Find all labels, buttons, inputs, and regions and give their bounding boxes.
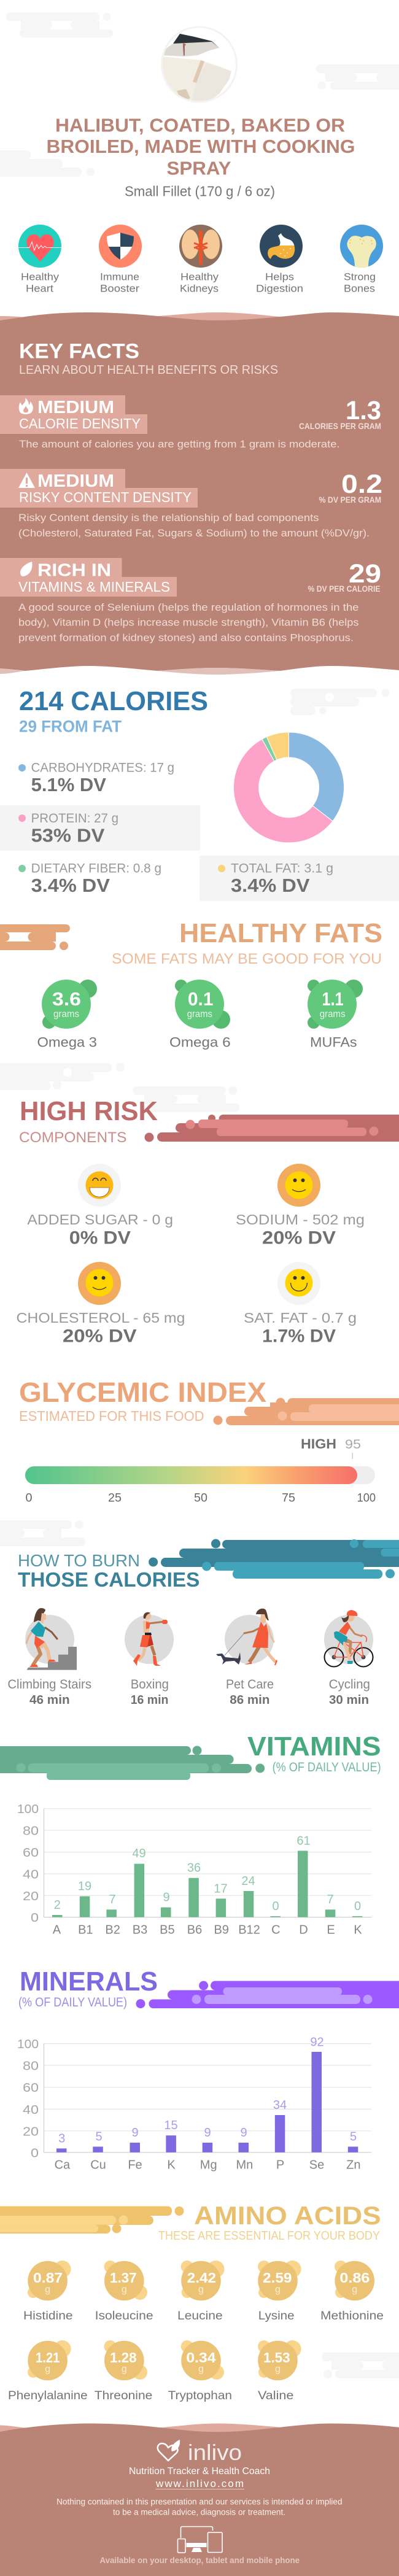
key facts heading: LEARN ABOUT HEALTH BENEFITS OR RISKS [19, 363, 278, 377]
bar chart: vitamins: 19 [78, 1879, 91, 1893]
disclaimer: Nothing contained in this presentation and our services is intended or implied [56, 2497, 343, 2507]
amino: phenylalanine [8, 2340, 88, 2402]
background pattern: amino acids [322, 2353, 399, 2378]
fat: mufas: MUFAs [310, 1035, 357, 1050]
bar chart: minerals: Mg [200, 2159, 217, 2172]
bar chart: vitamins: B9 [214, 1924, 229, 1937]
panel: footer [0, 2423, 399, 2576]
exercise: climbing stairs: 46 min [29, 1693, 70, 1707]
bar chart: vitamins: B3 [133, 1924, 147, 1937]
calorie density: 1.3 [346, 396, 381, 425]
exercise: climbing stairs: Climbing Stairs [7, 1677, 91, 1692]
calories heading: 214 CALORIES [19, 686, 208, 716]
benefit: healthy kidneys: Kidneys [180, 282, 219, 295]
amino: leucine: g [198, 2284, 204, 2295]
exercise: pet care: Pet Care [226, 1677, 274, 1692]
healthy fats heading [112, 918, 382, 967]
calorie density [0, 395, 381, 450]
bar chart: vitamins: B5 [160, 1924, 175, 1937]
benefit: helps digestion: Digestion [256, 282, 303, 295]
fat: mufas [308, 980, 363, 1050]
legend: total fat [200, 856, 399, 901]
bar chart: vitamins: 0 [354, 1900, 361, 1913]
amino: valine: Valine [258, 2389, 293, 2402]
glycemic index gauge: 50 [194, 1492, 207, 1505]
vitamins heading: VITAMINS [247, 1731, 381, 1762]
amino: lysine: 2.59 [263, 2270, 292, 2286]
disclaimer [56, 2497, 343, 2516]
bar chart: vitamins: 40 [23, 1868, 39, 1882]
bar chart: minerals: 9 [240, 2126, 247, 2140]
title: HALIBUT, COATED, BAKED OR [55, 114, 345, 136]
amino: tryptophan: g [198, 2364, 204, 2375]
icon: leaf [20, 562, 32, 576]
decoration: glycemic bars [214, 1398, 399, 1425]
key facts heading [19, 340, 278, 377]
amino acids heading: AMINO ACIDS [194, 2201, 381, 2230]
bar chart: vitamins: E [327, 1924, 335, 1937]
risk: sodium: SODIUM - 502 mg [236, 1212, 365, 1228]
amino: tryptophan: 0.34 [186, 2350, 216, 2365]
bar chart: vitamins: 36 [187, 1862, 201, 1875]
exercise: boxing: 16 min [131, 1693, 168, 1707]
benefit: healthy kidneys: Healthy [180, 271, 219, 282]
bar chart: vitamins [17, 1803, 371, 1937]
glycemic index heading [19, 1377, 266, 1424]
bar chart: minerals: 40 [23, 2103, 39, 2117]
bar chart: minerals: Zn [346, 2159, 360, 2172]
vitamins heading: (% OF DAILY VALUE) [273, 1760, 381, 1774]
rich in vitamins and minerals: RICH IN [37, 561, 111, 581]
exercise: climbing stairs [7, 1608, 91, 1707]
amino: methionine [320, 2261, 384, 2323]
bar chart: minerals: P [276, 2159, 284, 2172]
exercise: cycling: 30 min [329, 1693, 369, 1707]
bar chart: vitamins: 49 [132, 1847, 146, 1860]
bar chart: minerals: 5 [350, 2130, 357, 2143]
fat: omega 6: grams [187, 1009, 212, 1019]
amino: leucine [177, 2261, 225, 2323]
bar chart: minerals: 34 [273, 2098, 287, 2112]
risk: saturated fat [244, 1262, 357, 1347]
key facts heading: KEY FACTS [19, 340, 139, 363]
risky content density: MEDIUM [37, 471, 114, 491]
inlivo logo: inlivo [188, 2440, 242, 2465]
benefit: immune booster: Booster [100, 282, 139, 295]
amino: isoleucine [95, 2261, 153, 2323]
website link: www.inlivo.com [155, 2478, 244, 2489]
glycemic index gauge: 95 [345, 1437, 361, 1452]
legend: carbohydrates [18, 761, 174, 795]
vitamins heading [247, 1731, 381, 1774]
benefit: strong bones: Strong [344, 271, 376, 282]
amino: leucine: Leucine [177, 2310, 223, 2323]
legend: total fat: TOTAL FAT: 3.1 g [231, 862, 333, 876]
legend: dietary fiber: DIETARY FIBER: 0.8 g [31, 862, 161, 876]
bar chart: vitamins: B2 [105, 1924, 120, 1937]
rich in vitamins and minerals: 29 [349, 559, 381, 589]
legend: protein [0, 805, 200, 851]
bar chart: vitamins: 20 [23, 1890, 39, 1903]
amino: threonine [95, 2340, 152, 2402]
bar chart: minerals: 3 [58, 2132, 65, 2145]
benefit: healthy heart: Heart [26, 282, 53, 295]
risky content density: Risky Content density is the relationship of bad components [18, 512, 319, 524]
legend: dietary fiber: 3.4% DV [31, 875, 110, 896]
decoration: minerals bars [136, 1981, 399, 2008]
icon: warning triangle [18, 473, 35, 488]
benefit: helps digestion [256, 225, 303, 295]
rich in vitamins and minerals: prevent formation of kidney stones) and also contains Phosphorus. [18, 632, 354, 643]
rich in vitamins and minerals: VITAMINS & MINERALS [18, 579, 170, 595]
amino: valine: g [275, 2364, 281, 2375]
panel: key facts [0, 312, 399, 675]
tagline: Nutrition Tracker & Health Coach [129, 2466, 270, 2477]
risk: added sugar: 0% DV [69, 1228, 131, 1248]
amino: lysine [258, 2261, 301, 2323]
bar chart: vitamins: D [299, 1924, 308, 1937]
bar chart: minerals: 80 [23, 2060, 39, 2073]
risky content density: RISKY CONTENT DENSITY [19, 489, 192, 505]
benefit: immune booster [99, 225, 142, 295]
bar chart: vitamins: 7 [327, 1893, 334, 1906]
bar chart: minerals: Se [309, 2159, 324, 2172]
bar chart: minerals: 9 [204, 2126, 211, 2140]
glycemic index heading: ESTIMATED FOR THIS FOOD [19, 1408, 204, 1424]
food photo [161, 27, 237, 104]
exercise: cycling: Cycling [329, 1677, 370, 1692]
bar chart: vitamins: 100 [17, 1803, 39, 1816]
amino: histidine [23, 2261, 73, 2323]
availability note: Available on your desktop, tablet and mobile phone [99, 2555, 300, 2565]
healthy fats heading: HEALTHY FATS [179, 918, 382, 948]
minerals heading: MINERALS [20, 1967, 158, 1997]
calories heading [19, 686, 208, 735]
bar chart: vitamins: 17 [214, 1882, 228, 1895]
risk: sodium: 20% DV [262, 1228, 336, 1248]
amino: tryptophan: Tryptophan [168, 2389, 232, 2402]
serving size: Small Fillet (170 g / 6 oz) [125, 183, 275, 199]
amino: lysine: Lysine [258, 2310, 295, 2323]
amino: threonine: 1.28 [110, 2350, 137, 2365]
title: SPRAY [167, 157, 231, 179]
risk: added sugar: ADDED SUGAR - 0 g [27, 1212, 173, 1228]
benefit: healthy heart: Healthy [21, 271, 60, 282]
bar chart: vitamins: 7 [109, 1893, 116, 1906]
rich in vitamins and minerals [0, 558, 381, 643]
amino: threonine: g [122, 2364, 127, 2375]
risky content density: (Cholesterol, Saturated Fat, Sugars & Sodium) to the amount (%DV/gr). [18, 527, 370, 539]
bar chart: vitamins: 9 [163, 1891, 170, 1905]
rich in vitamins and minerals: % DV PER CALORIE [308, 584, 381, 594]
benefit: strong bones: Bones [344, 282, 375, 295]
amino: phenylalanine: g [45, 2364, 50, 2375]
bar chart: minerals: 60 [23, 2081, 39, 2095]
amino: methionine: g [352, 2284, 357, 2295]
amino: methionine: Methionine [320, 2310, 384, 2323]
fat: omega 3 [37, 980, 97, 1050]
bar chart: minerals: 92 [310, 2036, 324, 2049]
high risk heading [19, 1096, 158, 1146]
background pattern: top left [6, 12, 113, 37]
bar chart: minerals: Mn [236, 2159, 253, 2172]
calorie density: The amount of calories you are getting from 1 gram is moderate. [19, 438, 340, 450]
fat: mufas: grams [320, 1009, 345, 1019]
bar chart: minerals: 100 [17, 2038, 39, 2051]
glycemic index heading: GLYCEMIC INDEX [19, 1377, 266, 1408]
title: BROILED, MADE WITH COOKING [47, 136, 355, 157]
bar chart: minerals: Fe [128, 2159, 142, 2172]
minerals heading [18, 1967, 158, 2009]
icon: flame [19, 398, 33, 414]
rich in vitamins and minerals: body), Vitamin D (helps increase muscle strength), Vitamin B6 (helps [18, 616, 358, 629]
bar chart: vitamins: 2 [54, 1898, 61, 1912]
risk: cholesterol [16, 1262, 185, 1347]
legend: carbohydrates: CARBOHYDRATES: 17 g [31, 761, 174, 775]
inlivo logo [158, 2440, 242, 2465]
burn calories heading: HOW TO BURN [18, 1551, 140, 1570]
icon: devices [178, 2526, 222, 2553]
bar chart: minerals [17, 2036, 371, 2172]
glycemic index gauge: 100 [357, 1492, 376, 1505]
risky content density [0, 469, 382, 539]
legend: carbohydrates: 5.1% DV [31, 774, 106, 795]
exercise: pet care: 86 min [230, 1693, 269, 1707]
bar chart: vitamins: B1 [78, 1924, 93, 1937]
calories heading: 29 FROM FAT [19, 717, 122, 735]
legend: protein: 53% DV [31, 825, 105, 846]
exercise: pet care [216, 1609, 277, 1707]
bar chart: vitamins: B12 [238, 1924, 260, 1937]
exercise: boxing: Boxing [131, 1677, 169, 1692]
amino: methionine: 0.86 [339, 2270, 370, 2286]
legend: dietary fiber [18, 862, 161, 896]
background pattern: mid left [0, 150, 95, 177]
glycemic index gauge: 0 [26, 1492, 32, 1505]
risk: added sugar [27, 1164, 173, 1248]
exercise: boxing [125, 1612, 174, 1707]
risk: cholesterol: CHOLESTEROL - 65 mg [16, 1310, 185, 1326]
amino: isoleucine: g [122, 2284, 127, 2295]
amino: isoleucine: 1.37 [110, 2270, 137, 2286]
decoration: healthy fats bars [0, 924, 70, 950]
fat: omega 6 [169, 980, 231, 1050]
bar chart: vitamins: K [354, 1924, 362, 1937]
fat: omega 3: 3.6 [52, 988, 81, 1010]
bar chart: vitamins: 0 [272, 1900, 279, 1913]
amino: tryptophan [168, 2340, 232, 2402]
amino: threonine: Threonine [95, 2389, 152, 2402]
high risk heading: HIGH RISK [20, 1096, 158, 1126]
rich in vitamins and minerals: A good source of Selenium (helps the regulation of hormones in the [18, 601, 358, 613]
benefit: immune booster: Immune [100, 271, 139, 282]
legend: total fat: 3.4% DV [231, 875, 310, 896]
risk: sodium [236, 1164, 365, 1248]
background pattern: calories [290, 689, 389, 715]
bar chart: minerals: 20 [23, 2125, 39, 2138]
amino: lysine: g [275, 2284, 281, 2295]
decoration: high risk bars [145, 1115, 399, 1142]
calorie density: CALORIE DENSITY [19, 416, 141, 431]
bar chart: vitamins: B6 [187, 1924, 202, 1937]
glycemic index gauge: HIGH [301, 1436, 336, 1452]
burn calories heading [18, 1551, 200, 1591]
calorie density: CALORIES PER GRAM [299, 421, 381, 431]
high risk heading: COMPONENTS [19, 1129, 126, 1146]
amino: leucine: 2.42 [187, 2270, 216, 2286]
benefit: healthy kidneys [179, 225, 222, 295]
burn calories heading: THOSE CALORIES [18, 1568, 200, 1591]
risk: cholesterol: 20% DV [63, 1326, 137, 1347]
amino: valine [258, 2340, 301, 2402]
legend: protein: PROTEIN: 27 g [31, 811, 118, 826]
amino: valine: 1.53 [263, 2350, 290, 2365]
healthy fats heading: SOME FATS MAY BE GOOD FOR YOU [112, 951, 382, 967]
bar chart: vitamins: C [271, 1924, 281, 1937]
bar chart: minerals: 15 [164, 2119, 178, 2132]
donut chart [233, 732, 344, 843]
title [47, 114, 355, 179]
background pattern: top right [316, 64, 399, 90]
risk: saturated fat: SAT. FAT - 0.7 g [244, 1310, 357, 1326]
fat: omega 6: Omega 6 [169, 1035, 231, 1050]
disclaimer: to be a medical advice, diagnosis or treatment. [113, 2508, 285, 2516]
bar chart: minerals: 0 [31, 2146, 39, 2160]
bar chart: minerals: K [167, 2159, 176, 2172]
bar chart: vitamins: 0 [31, 1911, 39, 1925]
glycemic index gauge: 25 [108, 1492, 122, 1505]
decoration: amino acids bars [0, 2206, 184, 2234]
fat: omega 6: 0.1 [188, 988, 213, 1010]
amino: isoleucine: Isoleucine [95, 2310, 153, 2323]
benefit: helps digestion: Helps [265, 271, 294, 282]
background pattern: burn calories [0, 1520, 85, 1546]
bar chart: minerals: Ca [55, 2159, 71, 2172]
exercise: cycling [324, 1610, 373, 1707]
bar chart: vitamins: 24 [241, 1874, 255, 1888]
benefit: strong bones [340, 225, 383, 295]
risky content density: % DV PER GRAM [319, 495, 381, 505]
amino: histidine: 0.87 [33, 2270, 63, 2286]
bar chart: vitamins: 61 [296, 1834, 311, 1847]
fat: omega 3: grams [53, 1009, 79, 1019]
minerals heading: (% OF DAILY VALUE) [18, 1995, 127, 2009]
amino: histidine: g [45, 2284, 50, 2295]
amino acids heading: THESE ARE ESSENTIAL FOR YOUR BODY [158, 2229, 380, 2243]
bar chart: minerals: 5 [95, 2130, 103, 2143]
fat: mufas: 1.1 [322, 988, 344, 1010]
calorie density: MEDIUM [37, 398, 114, 417]
glycemic index gauge: 75 [282, 1492, 295, 1505]
bar chart: vitamins: A [53, 1924, 61, 1937]
amino: phenylalanine: Phenylalanine [8, 2389, 88, 2402]
amino: histidine: Histidine [23, 2310, 73, 2323]
bar chart: minerals: Cu [90, 2159, 106, 2172]
glycemic index gauge [25, 1436, 376, 1505]
risk: saturated fat: 1.7% DV [262, 1326, 336, 1347]
decoration: burn bars [149, 1539, 399, 1579]
bar chart: vitamins: 60 [23, 1846, 39, 1860]
amino acids heading [158, 2201, 381, 2243]
decoration: vitamins bars [0, 1746, 265, 1780]
benefit: healthy heart [18, 225, 61, 295]
bar chart: minerals: 9 [131, 2126, 139, 2140]
fat: omega 3: Omega 3 [37, 1035, 97, 1050]
amino: phenylalanine: 1.21 [36, 2350, 60, 2365]
bar chart: vitamins: 80 [23, 1824, 39, 1838]
background pattern: high risk [0, 1063, 239, 1112]
risky content density: 0.2 [341, 470, 382, 499]
